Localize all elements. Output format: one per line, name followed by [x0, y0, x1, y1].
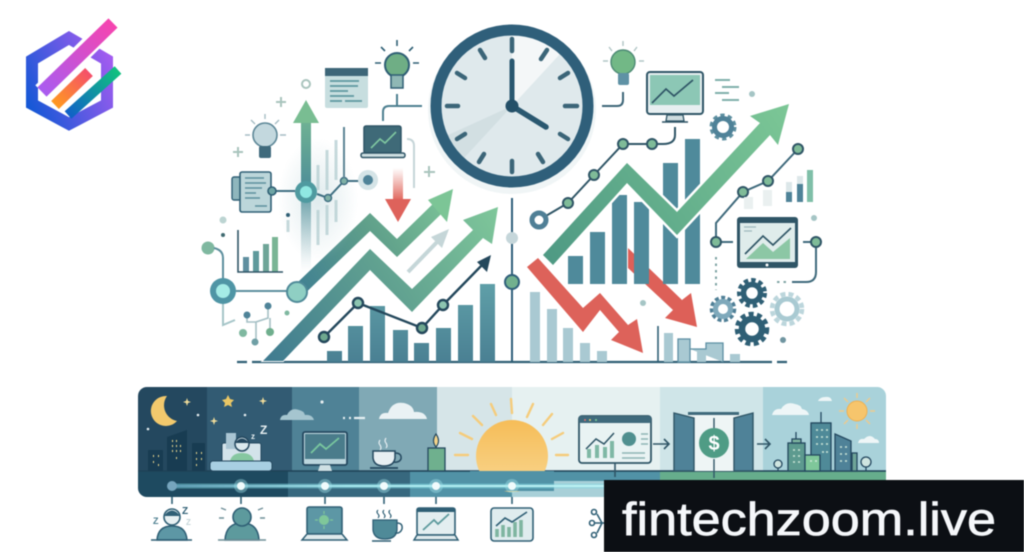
icon: analytics window: [491, 508, 533, 541]
pale lightbulb: [245, 114, 286, 158]
legend lines and dot: [715, 80, 755, 100]
logo: hexagon with diagonal bars: [32, 22, 118, 124]
small declining chart: [658, 326, 740, 362]
green lightbulb, top right: [602, 41, 644, 106]
rising sun: [455, 399, 568, 492]
node network around arrow: [268, 127, 378, 217]
open doors with dollar: [674, 412, 753, 478]
stars: [147, 395, 324, 430]
far right node line: [716, 144, 803, 242]
moon: [151, 396, 177, 426]
icon: sleepy person: [151, 506, 192, 540]
cloud over cup: [379, 403, 427, 419]
green zigzag arrow, upper: [297, 189, 453, 292]
rising green vertical arrow: [293, 100, 319, 272]
red down arrow: [385, 168, 411, 222]
icon: coffee cup: [372, 510, 402, 541]
right bar chart: [568, 139, 700, 284]
left bar chart: [327, 284, 495, 362]
day sun: [839, 393, 875, 429]
plus marks and ring: [233, 80, 435, 177]
green lightbulb, top left: [375, 40, 419, 88]
sleeper in bed: Z: [260, 423, 267, 437]
monitor in banner: [303, 432, 347, 471]
night city: [148, 430, 205, 471]
icon: sleepy person: Z: [186, 518, 191, 527]
large green arrow, right: [543, 104, 789, 265]
domain label banner: fintechzoom.live: [622, 493, 996, 545]
icon: network: [590, 510, 606, 538]
large green zigzag arrow, lower: [263, 207, 498, 361]
icon: awake person: [218, 508, 266, 540]
sleeper in bed: z: [251, 432, 255, 441]
trees: [774, 457, 871, 471]
document window: [325, 68, 368, 108]
pale arrow: [408, 229, 449, 272]
small bar chart, left: [238, 230, 283, 272]
pale bracket: [407, 139, 414, 188]
upper right node line: [532, 127, 675, 227]
gear, upper right: [712, 116, 734, 138]
icon: sleepy person: Z: [182, 506, 188, 517]
faded right bars: [530, 292, 607, 362]
clipboard document: [232, 172, 271, 212]
soft glow behind arrow: [278, 138, 358, 262]
red zigzag arrow: [527, 258, 643, 353]
dashes: [343, 417, 365, 419]
banner ground band: [138, 471, 886, 497]
banner sky segments: [138, 387, 886, 471]
city skyline: [788, 412, 857, 471]
arrow to city: [757, 439, 770, 449]
faded vertical signal bars: [288, 140, 336, 245]
icon: laptop with chart: [414, 508, 458, 540]
dashboard window: [579, 416, 651, 477]
timeline tick connectors: [172, 497, 512, 504]
arrow to door: [653, 439, 669, 449]
cloud in dusk segment: [280, 409, 314, 420]
scattered dots: [640, 300, 786, 343]
icon: sleepy person: Z: [153, 516, 159, 526]
monitor with chart: [647, 72, 703, 122]
skyline windows: [793, 430, 847, 462]
tablet connectors: [711, 215, 821, 290]
candle: [428, 434, 445, 471]
connector from bulb to laptop: [383, 94, 422, 121]
clock: [428, 26, 596, 194]
open doors with dollar: $: [708, 433, 720, 455]
mini bars, right: [744, 170, 813, 209]
dark line chart with nodes: [319, 255, 491, 342]
coffee cup: [370, 438, 401, 468]
second red arrow behind the bars: [628, 248, 697, 327]
timeline glow line: [167, 479, 620, 493]
icon: laptop with sun: [302, 507, 347, 540]
timeline banner: [138, 387, 886, 497]
day clouds: [772, 397, 879, 443]
small tree network: [239, 302, 290, 346]
domain label banner: [604, 480, 1024, 552]
tablet with chart: [737, 217, 798, 268]
gears cluster: [712, 280, 802, 344]
centre axis with baseline: [237, 198, 787, 362]
laptop with chart: [361, 126, 405, 158]
sleeper in bed: [210, 423, 272, 471]
left connection nodes: [202, 216, 307, 325]
